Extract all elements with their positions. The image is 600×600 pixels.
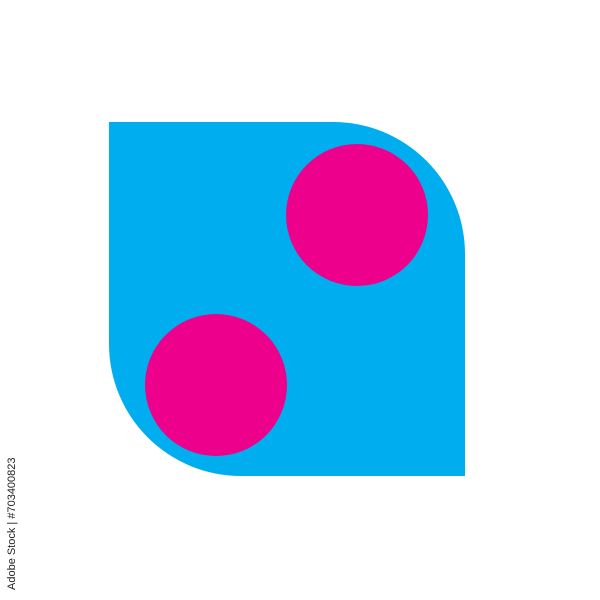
circle: bottom-left pink dot	[145, 314, 287, 456]
shape: blue rounded square	[109, 122, 465, 476]
side caption: stock id: Adobe Stock | #703400823	[6, 457, 18, 590]
circle: top-right pink dot	[286, 144, 428, 286]
